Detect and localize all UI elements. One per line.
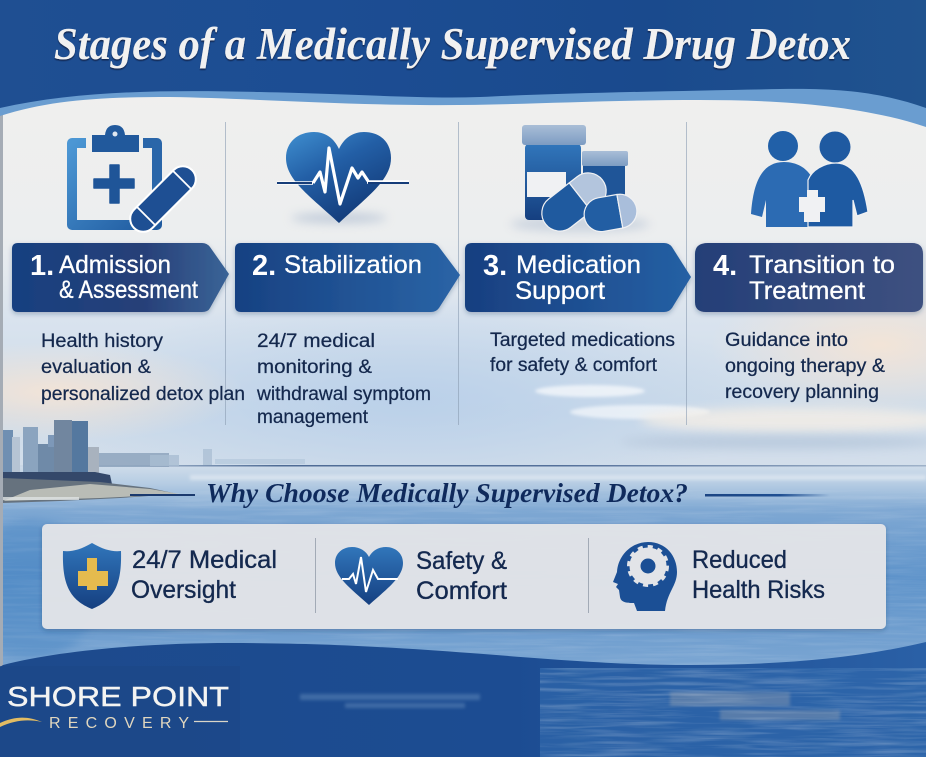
step 1 description: personalized detox plan (41, 384, 245, 405)
logo (0, 681, 229, 732)
logo: RECOVERY (49, 715, 189, 732)
icon: heart with pulse (277, 132, 409, 223)
step 2 title (252, 250, 422, 282)
benefit 1 text: Oversight (131, 576, 236, 604)
benefit 2 text: Safety & (416, 547, 507, 575)
step 2 description (256, 331, 431, 428)
step 4 description: ongoing therapy & (725, 356, 885, 377)
step 3 title (483, 250, 641, 305)
step 2 description: 24/7 medical (257, 331, 375, 352)
skyline (3, 420, 305, 503)
icon: clipboard with pen (72, 125, 201, 237)
benefit 3 text (692, 546, 825, 604)
step 1 title: & Assessment (59, 276, 198, 304)
step 1 description (41, 331, 245, 405)
icon: head with gear (613, 542, 677, 611)
step 3 title: 3. (483, 250, 507, 282)
step 3 description: for safety & comfort (490, 355, 658, 376)
step 3 title: Support (515, 277, 605, 305)
logo: SHORE POINT (7, 681, 229, 712)
top banner dark band (0, 0, 926, 108)
footer water reflections (0, 666, 926, 757)
panel: benefits (42, 524, 886, 629)
benefit 3 text: Reduced (692, 546, 787, 574)
subheading: Why Choose Medically Supervised Detox? (206, 478, 688, 508)
step 4 description (725, 330, 885, 403)
step 2 description: monitoring & (257, 357, 372, 378)
step 4 title: Transition to (749, 251, 895, 279)
title: Stages of a Medically Supervised Drug Detox (54, 19, 851, 69)
benefit 2 text (416, 547, 507, 605)
step 3 description: Targeted medications (490, 330, 675, 351)
benefit 1 text (131, 546, 277, 604)
footer wave (0, 642, 926, 757)
step banner 2 (235, 243, 460, 312)
icon: benefit heart (335, 547, 403, 605)
benefit 2 text: Comfort (416, 577, 507, 605)
step 1 description: Health history (41, 331, 164, 352)
step 3 description (490, 330, 675, 376)
icon: shield with cross (63, 543, 121, 609)
step 3 title: Medication (516, 251, 641, 279)
icon: two people with medical cross (751, 131, 868, 227)
step 2 description: management (257, 407, 369, 428)
step 1 title: Admission (59, 251, 171, 279)
step 4 title: Treatment (749, 277, 865, 305)
step banner 3 (465, 243, 691, 312)
step 2 title: Stabilization (284, 251, 422, 279)
benefit 1 text: 24/7 Medical (132, 546, 277, 574)
step 4 description: Guidance into (725, 330, 848, 351)
dividers (226, 122, 686, 425)
icon: medicine bottles and capsules (510, 125, 650, 238)
step 1 title: 1. (30, 250, 54, 282)
step 2 description: withdrawal symptom (256, 384, 431, 405)
benefit 3 text: Health Risks (692, 576, 825, 604)
top banner (0, 0, 926, 127)
step 1 description: evaluation & (41, 357, 151, 378)
step banner 1 (12, 243, 229, 312)
step 4 title (713, 250, 895, 305)
step 4 description: recovery planning (725, 382, 879, 403)
step banner 4 (695, 243, 923, 312)
step 4 title: 4. (713, 250, 737, 282)
step 1 title (30, 250, 198, 304)
step 2 title: 2. (252, 250, 276, 282)
